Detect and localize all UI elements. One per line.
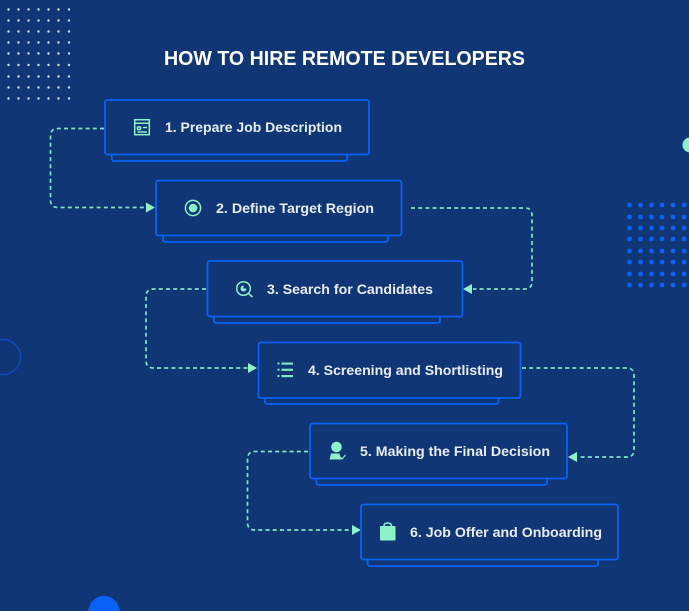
icon: search: [237, 282, 252, 297]
blue dot grid decoration: [627, 203, 686, 287]
white dot grid decoration: [7, 8, 70, 100]
connector: step 1 to step 2: [50, 128, 155, 212]
panel: step 2: [156, 180, 402, 242]
icon: target: [185, 200, 201, 216]
connector: step 4 to step 5: [522, 368, 634, 462]
title: HOW TO HIRE REMOTE DEVELOPERS: [164, 48, 525, 70]
label: step 4: 4. Screening and Shortlisting: [308, 362, 503, 378]
connector: step 2 to step 3: [411, 208, 532, 294]
panel: step 4: [258, 342, 520, 404]
icon: person with check: [330, 442, 346, 460]
panel: step 1: [105, 100, 369, 161]
connector: step 5 to step 6: [248, 452, 361, 535]
icon: list: [278, 362, 293, 377]
panel: step 3: [208, 261, 462, 323]
label: step 5: 5. Making the Final Decision: [360, 443, 550, 459]
icon: job description: [135, 120, 149, 135]
outlined ring decoration: [0, 340, 20, 374]
panel: step 5: [310, 424, 567, 485]
panel: step 6: [361, 504, 618, 566]
mint circle decoration: [682, 138, 689, 152]
solid blue circle decoration: [88, 596, 120, 611]
label: step 2: 2. Define Target Region: [216, 200, 374, 216]
connector: step 3 to step 4: [146, 289, 257, 373]
label: step 1: 1. Prepare Job Description: [165, 119, 342, 135]
label: step 3: 3. Search for Candidates: [267, 281, 433, 297]
icon: shopping bag: [380, 523, 396, 540]
label: step 6: 6. Job Offer and Onboarding: [410, 524, 602, 540]
